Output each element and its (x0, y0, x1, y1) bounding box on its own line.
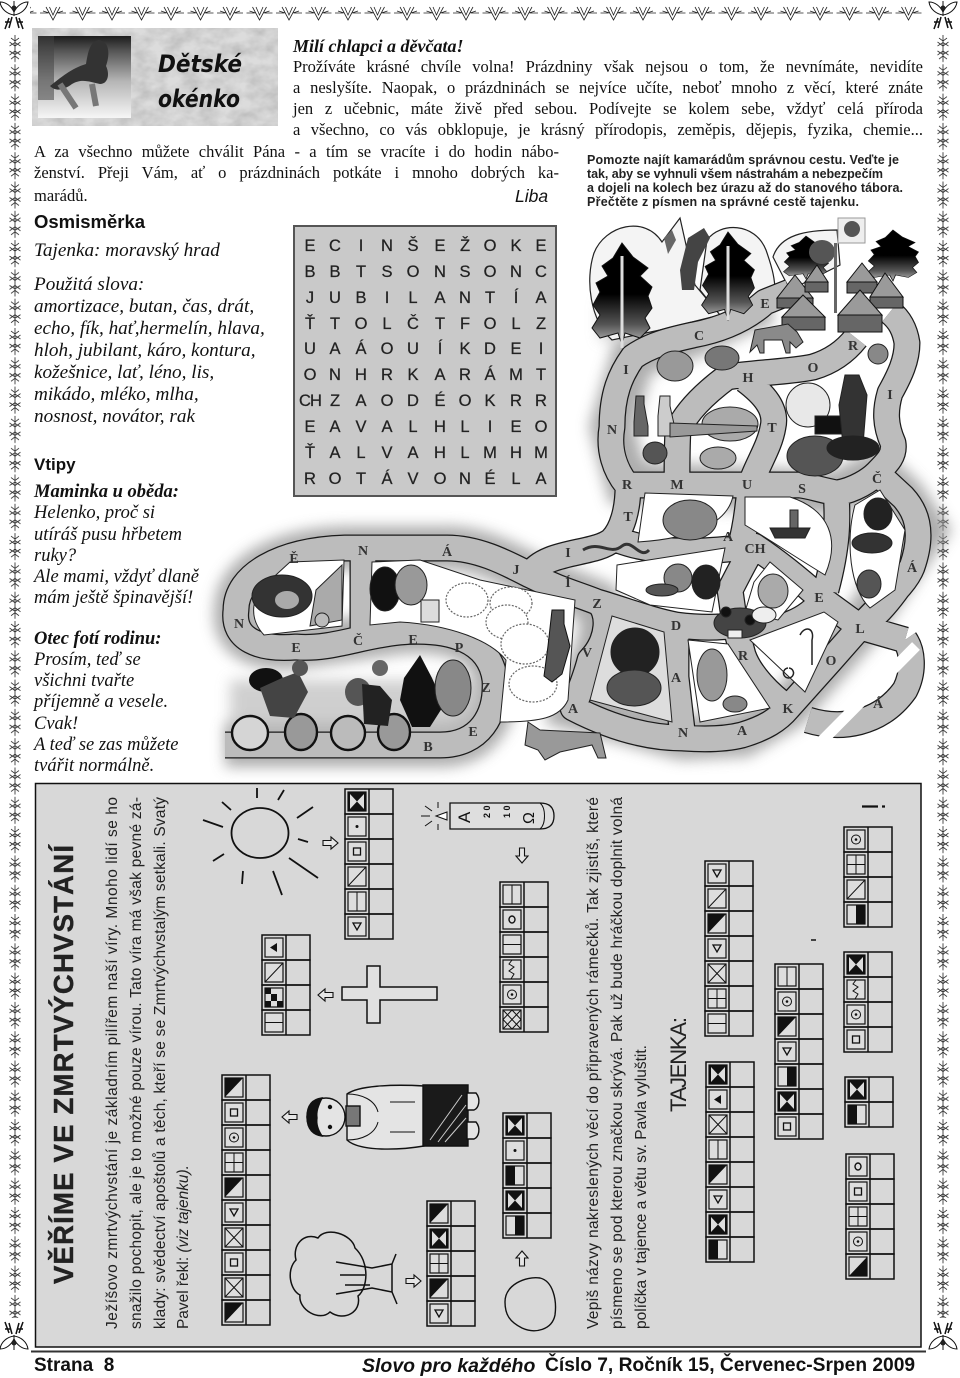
word search grid: ŤTOLČTFOLZ (305, 314, 546, 333)
icon: cross (342, 966, 437, 1023)
road letters: R (848, 339, 859, 354)
maze instructions: tak, aby se vyhnuli všem nástrahám a nebezpečím (587, 167, 883, 181)
continuation text block: marádů. (34, 186, 88, 205)
maze instructions: a dojeli na kolech bez úrazu až do stanového tábora. (587, 181, 903, 195)
word search grid (294, 226, 556, 496)
flag with sun (834, 218, 865, 313)
joke: Otec fotí rodinu: Cvak! (34, 714, 78, 734)
greeting text block (292, 36, 923, 139)
greeting text block: a neslyšíte. Naopak, o prázdninách se nejvíce učíte, neboť mnoho z věcí, které znáte (293, 78, 923, 97)
lower maze panels (590, 490, 905, 722)
road letters: Á (907, 559, 918, 576)
grid: sun (345, 789, 393, 939)
road letters: T (767, 421, 777, 436)
greeting text block: Milí chlapci a děvčata! (293, 36, 463, 56)
road letters: E (760, 297, 770, 312)
road letters: K (783, 702, 794, 717)
tents (777, 263, 903, 332)
snake (583, 544, 649, 553)
joke: Otec fotí rodinu: příjemně a vesele. (34, 692, 168, 712)
word-search solution and word list: mikádo, mléko, mlha, (34, 384, 199, 405)
climbers (664, 228, 710, 290)
candle with alpha and omega (421, 802, 554, 830)
road letters: N (234, 617, 244, 632)
word search grid: UAÁOUÍKDEI (304, 339, 543, 358)
intro text (rotated): Ježíšovo zmrtvýchvstání je základním pilířem naší víry. Mnoho lidí se ho (104, 797, 121, 1329)
road letters: Ě (289, 550, 299, 567)
road letters: E (814, 591, 824, 606)
maze instructions (587, 153, 903, 209)
lynx (525, 722, 606, 760)
continuation text block (34, 142, 559, 206)
word-search solution and word list: kožešnice, lať, léno, lis, (34, 362, 214, 383)
road letters: Č (353, 632, 363, 649)
grid: egg (503, 1113, 551, 1238)
joke: Maminka u oběda: Maminka u oběda: (34, 482, 179, 502)
word-search solution and word list: echo, fík, hať,hermelín, hlava, (34, 318, 265, 339)
road letters: R (622, 478, 633, 493)
heading: Vtipy: Vtipy (34, 455, 76, 474)
candle with alpha and omega: 2 0 (482, 805, 492, 818)
word search grid: ECINŠEŽOKE (304, 236, 547, 255)
trees and house panel (370, 560, 575, 722)
maze illustration (225, 218, 925, 760)
road letters: E (291, 641, 301, 656)
soft shading around roads (225, 302, 925, 745)
grid: tree (427, 1201, 475, 1326)
word search grid: EAVALHLIEO (304, 418, 548, 436)
candle with alpha and omega: 1 0 (502, 805, 512, 818)
greeting text block: a všechno, co vás obklopuje, je krásný přírodopis, zeměpis, dějepis, fyzika, chemie... (293, 120, 923, 139)
roads (225, 292, 918, 749)
icon: praying person (307, 1085, 479, 1149)
bushes and forest figures (634, 344, 888, 476)
road letters: N (358, 544, 368, 559)
icon: tree (290, 1232, 397, 1316)
word search grid: JUBILANTÍA (306, 288, 547, 307)
photo of girl on a swing (38, 36, 131, 118)
word search grid: BBTSONSONC (304, 263, 547, 281)
grid: candle (500, 882, 548, 1032)
arrow: tree to grid (406, 1275, 421, 1287)
road letters: V (582, 646, 592, 661)
road letters: M (670, 478, 684, 493)
word-search solution and word list (34, 240, 265, 427)
road letters: R (738, 649, 749, 664)
road letters: H (743, 371, 754, 386)
instructions text (rotated): Vepiš názvy nakreslených věcí do připravených rámečků. Tak zjistíš, které (585, 797, 602, 1329)
icon: egg (505, 1278, 555, 1331)
footer: magazine name: Slovo pro každého (362, 1355, 535, 1377)
maze instructions: Pomozte najít kamarádům správnou cestu. Veďte je (587, 153, 899, 167)
banner title line 2: okénko (158, 85, 240, 113)
joke: Otec fotí rodinu: Prosím, teď se (34, 650, 141, 670)
joke: Otec fotí rodinu: tvářit normálně. (34, 756, 154, 776)
road letters: A (723, 530, 734, 545)
word search grid: ROTÁVONÉLA (304, 469, 547, 488)
joke: Maminka u oběda: Helenko, proč si (34, 503, 155, 523)
grid: person (222, 1075, 270, 1325)
instructions text (rotated) (585, 797, 650, 1329)
road letters: I (565, 546, 571, 561)
continuation text block: ženství. Přeji Vám, ať o prázdninách potkáte i mnoho dobrých ka- (34, 163, 559, 182)
joke: Maminka u oběda: mám ještě špinavější! (34, 588, 193, 608)
word search grid: CHZAODÉOKRR (299, 391, 547, 410)
cow (750, 324, 803, 353)
road letters: O (826, 654, 837, 669)
road letters: A (737, 724, 748, 739)
joke: Otec fotí rodinu: A teď se zas můžete (34, 735, 179, 755)
word-search solution and word list: Tajenka: moravský hrad (34, 240, 220, 261)
continuation text block: Liba (515, 186, 548, 206)
road letters: O (808, 361, 819, 376)
road letters: P (455, 641, 464, 656)
footer rule (31, 1350, 926, 1352)
icon: sun (203, 788, 318, 895)
joke: Otec fotí rodinu: Otec fotí rodinu: (34, 629, 161, 649)
road letters: D (671, 619, 681, 634)
road letters: N (607, 423, 617, 438)
candle with alpha and omega: Ω (521, 812, 538, 824)
arrow: cross to grid (318, 989, 333, 1001)
arrow: sun to grid (323, 837, 338, 849)
road letters: S (798, 482, 806, 497)
greeting text block: jen z učebnic, máte živě před sebou. Podívejte se kolem sebe, vždyť celá příroda (293, 99, 923, 118)
road letters: C (694, 329, 704, 344)
joke: Otec fotí rodinu: všichni tvařte (34, 671, 134, 691)
road letters: E (468, 725, 478, 740)
shepherd (544, 610, 570, 682)
road letters: Č (872, 470, 882, 487)
trees (592, 230, 918, 348)
banner title: Dětské (158, 50, 242, 78)
road letters: A (568, 702, 579, 717)
intro text (rotated) (104, 797, 192, 1329)
word-search solution and word list: hloh, jubilant, káro, kontura, (34, 340, 256, 361)
tajenka grids (705, 806, 894, 1279)
word search grid: ŤALVAHLMHM (305, 443, 548, 462)
road letters: E (408, 633, 418, 648)
boar panel (252, 560, 344, 635)
road letters: U (742, 478, 752, 493)
road letters: Á (442, 543, 453, 560)
road letters: I (887, 388, 893, 403)
road letters: L (855, 622, 865, 637)
road letters: Á (873, 695, 884, 712)
intro text (rotated): snažilo pochopit, ale je to možné pouze vírou. Tato víra má však pevné zá- (128, 797, 145, 1329)
tajenka heading: TAJENKA: (666, 1017, 691, 1112)
intro text (rotated): Pavel řekl: (viz tajenku). (175, 1165, 192, 1329)
joke: Maminka u oběda: utíráš pusu hřbetem (34, 525, 182, 545)
road letters: Z (592, 597, 602, 612)
grid: cross (262, 935, 310, 1035)
word-search solution and word list: amortizace, butan, čas, drát, (34, 296, 254, 317)
panel title (rotated): VĚŘÍME VE ZMRTVÝCHVSTÁNÍ (48, 844, 79, 1284)
intro text (rotated): klady: svědectví apoštolů a těch, kteří se se Zmrtvýchvstalým setkali. Svatý (152, 797, 169, 1329)
road letters: A (671, 671, 682, 686)
hills (590, 218, 840, 340)
footer: page number: Strana 8 (34, 1355, 114, 1376)
continuation text block: A za všechno můžete chválit Pána - a tím se vracíte i do hodin nábo- (34, 142, 559, 161)
word-search solution and word list: nosnost, novátor, rak (34, 406, 195, 427)
arrow: person to grid (282, 1111, 297, 1123)
joke: Maminka u oběda: ruky? (34, 546, 76, 566)
road letters: Z (481, 681, 491, 696)
instructions text (rotated): políčka v tajence a větu sv. Pavla vyluštit. (633, 1045, 650, 1329)
road letters: B (423, 740, 433, 755)
arrow: candle to grid (516, 848, 528, 863)
word-search solution and word list: Použitá slova: (34, 274, 144, 295)
road letters (234, 297, 918, 755)
joke: Maminka u oběda: Ale mami, vždyť dlaně (34, 567, 199, 587)
footer: issue info: Číslo 7, Ročník 15, Červenec-Srpen 2009 (545, 1355, 915, 1376)
word search grid: ONHRKARÁMT (304, 365, 546, 384)
header banner: Dětské okénko (32, 28, 278, 126)
joke: Otec fotí rodinu (32, 629, 179, 776)
road letters: J (512, 563, 520, 578)
road letters: CH (744, 542, 766, 557)
greeting text block: Prožíváte krásné chvíle volna! Prázdniny však nejsou o tom, že nevnímáte, nevidíte (293, 57, 923, 76)
road letters: T (623, 510, 633, 525)
road letters: N (678, 726, 688, 741)
road letters: I (623, 363, 629, 378)
panel: Věříme ve zmrtvýchvstání (36, 784, 921, 1347)
candle with alpha and omega: A (455, 811, 474, 823)
arrow: egg to grid (516, 1251, 528, 1266)
sheep and shepherd (446, 583, 557, 702)
instructions text (rotated): písmeno se pod kterou značkou skrývá. Pak už bude hráčkou doplnit volná (609, 797, 626, 1329)
road letters: Í (565, 574, 571, 591)
cyclists (232, 655, 471, 750)
heading: Osmisměrka: Osmisměrka (34, 211, 145, 232)
maze instructions: Přečtěte z písmen na správné cestě tajenku. (587, 195, 859, 209)
joke: Maminka u oběda (33, 482, 200, 608)
